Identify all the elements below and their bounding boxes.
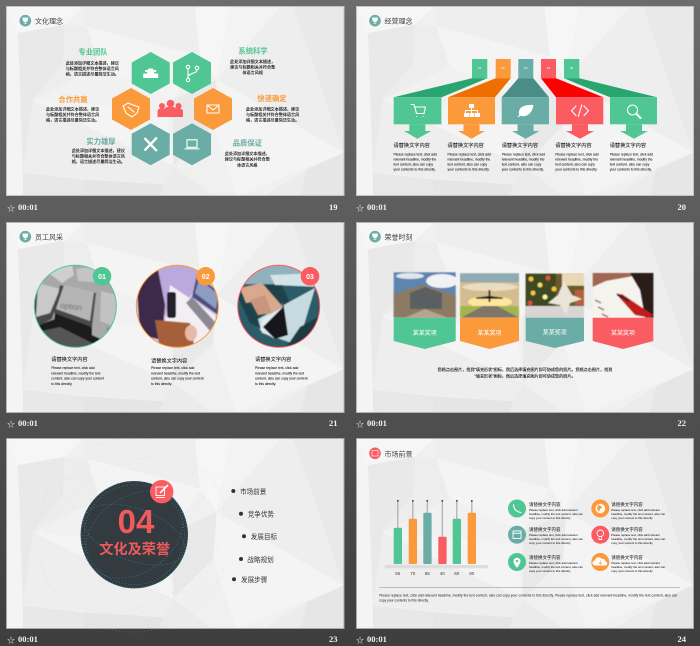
label: systematic science: 此处添加详细文本描述， xyxy=(230,58,275,64)
text column 2: Please replace text, click add xyxy=(448,152,491,156)
text column 4: text content, also can copy xyxy=(555,162,595,166)
item: location pin xyxy=(508,553,583,573)
text block 3: to this directly. xyxy=(255,382,276,386)
text column 5: text content, also can copy xyxy=(610,162,650,166)
text block 2: Please replace text, click add xyxy=(151,366,194,370)
text column 4: your contents to this directly. xyxy=(555,168,597,172)
dark core circle xyxy=(69,473,200,596)
award card 4: notebook and pen xyxy=(593,273,653,349)
column 01: cart: 01 xyxy=(478,66,482,70)
text column 4 xyxy=(555,141,599,172)
label: strength: 此处添加详细文本描述，建议 xyxy=(72,147,125,153)
column 05: search: 05 xyxy=(570,66,573,70)
text column 5: 请替换文字内容 xyxy=(610,141,646,149)
text column 1: text content, also can copy xyxy=(394,162,433,166)
caption: “填充形状”图标，然后选择填充图片即可协成您的照片。 xyxy=(475,373,575,379)
text block 3: content, also can copy your content xyxy=(255,376,308,380)
icon: title badge xyxy=(20,15,31,26)
text block 1: to this directly. xyxy=(51,382,72,386)
title: 荣誉时刻 xyxy=(384,232,412,242)
item: calendar xyxy=(508,526,583,545)
footer: 20 xyxy=(678,202,686,212)
label: strength xyxy=(72,137,125,164)
icon: title badge xyxy=(369,448,381,459)
label: systematic science xyxy=(230,46,275,75)
footer: 19 xyxy=(329,202,338,212)
network sphere xyxy=(14,426,252,644)
text column 4: 请替换文字内容 xyxy=(555,141,592,149)
label: quick decision: 此处添加详细文本描述，建议 xyxy=(246,106,299,112)
text block 1: Please replace text, click add xyxy=(51,366,95,370)
photo circle 3: tablet: 03 xyxy=(306,274,314,281)
footer: ☆ xyxy=(7,636,15,645)
column 05: search xyxy=(564,59,657,139)
photo circle 1: keyboard: 01 xyxy=(98,274,106,281)
label: strength: 格，语言描述尽量简洁生动。 xyxy=(72,158,125,164)
footer: 22 xyxy=(678,418,686,428)
item: location pin: copy your content to this directly. xyxy=(529,569,571,573)
text column 1: your contents to this directly. xyxy=(394,168,436,172)
slide 19: culture concept xyxy=(6,6,344,213)
text column 3 xyxy=(502,141,545,172)
agenda item 3 xyxy=(242,532,277,541)
item: globe: headline, modify the text content, also can xyxy=(611,512,666,516)
footer: ☆ xyxy=(7,420,15,429)
label: professional team: 专业团队 xyxy=(78,48,108,56)
label: professional team: 此处添加详细文本描述，建议 xyxy=(66,60,119,66)
footer xyxy=(356,202,686,213)
agenda item 1: 市场前景 xyxy=(240,487,267,496)
footer: 23 xyxy=(329,634,338,644)
photo circle 1: keyboard xyxy=(33,264,118,350)
item: cloud: 请替换文字内容 xyxy=(611,554,643,561)
agenda item 4 xyxy=(239,555,274,564)
slide 23: section 04 cover xyxy=(6,426,344,645)
bar chart: 80 xyxy=(469,571,475,576)
label: quick decision: 快速确定 xyxy=(257,94,287,103)
footnote paragraph: Please replace text, click add relevant headline, modify the text content, also can copy your contents to this directly. Please replace text, click add relevant headline, modify the text content, also can xyxy=(379,594,677,598)
text column 2: your contents to this directly. xyxy=(448,168,490,172)
item: calendar: Please replace text, click add relevant xyxy=(529,533,578,537)
icon: title badge xyxy=(369,15,381,26)
photo circle 2: laptop and coffee: 02 xyxy=(202,274,210,281)
item: cloud xyxy=(591,553,666,573)
text column 1: 请替换文字内容 xyxy=(394,141,430,149)
slide 21: staff style xyxy=(6,222,344,429)
text column 2: 请替换文字内容 xyxy=(448,141,484,149)
item: cloud: Please replace text, click add relevant xyxy=(611,561,660,565)
hexagon: handshake xyxy=(112,88,150,130)
text column 5: Please replace text, click add xyxy=(610,152,653,156)
caption: 您格点击图片，找到“填充形状”图标，然后选择填充图片即可协成您的照片。您格点击图片，找到 xyxy=(438,366,612,372)
column 04: code: 04 xyxy=(547,66,550,70)
text block 1: content, also can copy your content xyxy=(51,376,104,380)
text column 5: your contents to this directly. xyxy=(610,168,652,172)
item: phone: headline, modify the text content, also can xyxy=(529,512,583,516)
award card 4: notebook and pen: 某某奖项 xyxy=(611,329,635,337)
item: location pin: 请替换文字内容 xyxy=(529,554,561,561)
text column 2 xyxy=(448,141,491,172)
footer xyxy=(356,418,686,429)
text column 4: Please replace text, click add xyxy=(555,152,599,156)
item: phone: Please replace text, click add relevant xyxy=(529,508,578,512)
footer xyxy=(7,418,338,429)
item: location pin: headline, modify the text content, also can xyxy=(529,565,583,569)
title: 市场前景 xyxy=(384,449,412,458)
item: cloud: copy your content to this directly. xyxy=(611,569,653,573)
slide 24: market outlook xyxy=(356,438,694,645)
column 02: org chart: 02 xyxy=(501,66,505,70)
item: location pin: Please replace text, click add relevant xyxy=(529,561,578,565)
item: light bulb xyxy=(591,526,666,545)
text block 1: relevant headline, modify the text xyxy=(51,372,100,376)
column 04: code xyxy=(541,59,603,139)
label: systematic science: 建议与标题相关并符合整 xyxy=(230,64,275,70)
label: quick decision: 与标题相关并符合整体语言风 xyxy=(246,111,299,117)
bar chart: 70 xyxy=(410,571,416,576)
item: light bulb: 请替换文字内容 xyxy=(611,526,643,533)
text block 2: 请替换文字内容 xyxy=(151,356,187,364)
label: quality assurance: 体语言风格 xyxy=(237,162,258,168)
icon: red team figures xyxy=(158,100,183,117)
bar chart: 55 xyxy=(395,571,401,576)
title: 经营理念 xyxy=(384,16,412,26)
hexagon: laptop xyxy=(173,123,211,165)
text column 2: text content, also can copy xyxy=(448,162,487,166)
photo circle 1: keyboard: option xyxy=(60,301,82,312)
slide 22: honour moments xyxy=(356,222,694,429)
photo circle 2: laptop and coffee xyxy=(135,264,220,350)
column 03: leaf: 03 xyxy=(524,66,528,70)
footnote paragraph: copy your contents to this directly. xyxy=(379,598,429,602)
label: strength: 与标题相关并符合整体语言风 xyxy=(72,152,125,158)
text block 2 xyxy=(151,356,204,386)
bar chart: 60 xyxy=(454,571,460,576)
agenda item 2: 竞争优势 xyxy=(248,510,274,518)
text column 4: relevant headline, modify the xyxy=(555,158,598,162)
title: 文化理念 xyxy=(35,16,63,26)
item: light bulb: Please replace text, click add relevant xyxy=(611,533,660,537)
bar chart: 40 xyxy=(440,571,445,576)
footer: 24 xyxy=(678,634,687,644)
bar chart: 85 xyxy=(425,571,430,576)
label: quality assurance xyxy=(225,138,270,168)
text column 1: Please replace text, click add xyxy=(394,152,437,156)
footer: ☆ xyxy=(356,636,364,645)
award card 1: building: 某某奖项 xyxy=(413,329,437,337)
text column 1: relevant headline, modify the xyxy=(394,158,436,162)
agenda item 5: 发展步骤 xyxy=(241,575,268,584)
item: calendar: copy your content to this directly. xyxy=(529,541,571,545)
footer: ☆ xyxy=(7,204,15,213)
title: 员工风采 xyxy=(35,232,63,242)
label: cooperation: 合作共赢 xyxy=(58,95,88,104)
item: phone xyxy=(508,500,583,520)
footer xyxy=(7,202,338,213)
item: light bulb: copy your content to this directly. xyxy=(611,541,653,545)
item: phone: copy your content to this directly. xyxy=(529,516,571,520)
text block 3: relevant headline, modify the text xyxy=(255,372,304,376)
text block 3 xyxy=(255,355,308,386)
agenda item 3: 发展目标 xyxy=(251,532,277,541)
slide 20: business concept xyxy=(356,6,694,213)
label: strength: 实力雄厚 xyxy=(86,137,116,146)
hexagon: tools xyxy=(132,123,170,165)
label: quick decision: 格，语言描述尽量简洁生动。 xyxy=(246,116,299,122)
photo circle 3: tablet xyxy=(237,264,322,349)
award card 2: plane on runway xyxy=(460,273,519,349)
label: professional team xyxy=(66,48,119,76)
text column 5: relevant headline, modify the xyxy=(610,158,653,162)
text block 2: to this directly. xyxy=(151,382,172,386)
text column 3: relevant headline, modify the xyxy=(502,158,545,162)
footer: 00:01 xyxy=(367,202,387,212)
item: calendar: 请替换文字内容 xyxy=(529,526,561,533)
icon: edit badge xyxy=(150,480,173,503)
footer: 00:01 xyxy=(367,634,387,644)
label: quality assurance: 此处添加详细文本描述， xyxy=(225,150,270,156)
text block 2: relevant headline, modify the text xyxy=(151,372,200,376)
award card 3: festive bokeh: 某某奖项 xyxy=(543,328,567,336)
hexagon: mail xyxy=(194,88,232,130)
footer: 00:01 xyxy=(18,634,38,644)
footer: 00:01 xyxy=(18,418,38,428)
footer: 00:01 xyxy=(18,202,38,212)
agenda item 1 xyxy=(231,487,267,496)
text block 3: Please replace text, click add xyxy=(255,366,298,370)
label: systematic science: 体语言风格 xyxy=(242,69,263,75)
label: cooperation: 格，语言描述尽量简洁生动。 xyxy=(46,116,99,122)
agenda item 2 xyxy=(239,510,274,518)
hexagon: team xyxy=(132,52,170,94)
footer: 21 xyxy=(329,418,338,428)
text block 2: content, also can copy your content xyxy=(151,376,204,380)
number 04: 04 xyxy=(118,503,155,540)
text column 3: Please replace text, click add xyxy=(502,152,545,156)
section heading: 文化及荣誉 xyxy=(99,541,170,558)
icon: title badge xyxy=(369,231,381,242)
text column 5 xyxy=(610,141,653,172)
icon: title badge xyxy=(20,231,31,242)
label: professional team: 与标题相关并符合整体语言风 xyxy=(66,65,119,71)
bar chart xyxy=(385,500,488,576)
footer xyxy=(7,634,338,645)
item: globe xyxy=(591,500,666,520)
label: systematic science: 系统科学 xyxy=(238,46,268,56)
footer: 00:01 xyxy=(367,418,387,428)
column 01: cart xyxy=(394,59,487,139)
item: calendar: headline, modify the text content, also can xyxy=(529,537,583,541)
item: globe: Please replace text, click add relevant xyxy=(611,508,660,512)
text column 2: relevant headline, modify the xyxy=(448,158,490,162)
footer: ☆ xyxy=(356,420,364,429)
photo circle 1: keyboard: co xyxy=(107,327,114,333)
item: cloud: headline, modify the text content, also can xyxy=(611,565,666,569)
item: phone: 请替换文字内容 xyxy=(529,501,561,508)
item: globe: 请替换文字内容 xyxy=(611,501,643,508)
text block 1: 请替换文字内容 xyxy=(51,355,88,363)
label: quick decision xyxy=(246,94,299,122)
text column 3: your contents to this directly. xyxy=(502,168,544,172)
agenda item 5 xyxy=(232,575,268,584)
label: quality assurance: 品质保证 xyxy=(233,138,263,148)
item: light bulb: headline, modify the text content, also can xyxy=(611,537,666,541)
award card 2: plane on runway: 某某奖项 xyxy=(477,329,502,337)
text column 3: text content, also can copy xyxy=(502,162,542,166)
award card 1: building xyxy=(394,272,458,349)
text block 3: 请替换文字内容 xyxy=(255,355,291,363)
label: professional team: 格，语言描述尽量简洁生动。 xyxy=(66,70,119,76)
text column 1 xyxy=(394,141,437,172)
footer: ☆ xyxy=(356,204,364,213)
column 02: org chart xyxy=(448,59,511,139)
hexagon: branch xyxy=(173,52,211,94)
label: cooperation xyxy=(46,95,99,122)
footer xyxy=(356,634,687,645)
award card 3: festive bokeh xyxy=(526,274,584,348)
text block 1 xyxy=(51,355,104,386)
text column 3: 请替换文字内容 xyxy=(502,141,538,149)
label: cooperation: 此处添加详细文本描述，建议 xyxy=(46,106,99,112)
column 03: leaf xyxy=(502,59,549,139)
label: quality assurance: 建议与标题相关并符合整 xyxy=(225,156,270,162)
agenda item 4: 战略规划 xyxy=(247,555,274,564)
label: cooperation: 与标题相关并符合整体语言风 xyxy=(46,111,99,117)
item: globe: copy your content to this directly. xyxy=(611,516,653,520)
